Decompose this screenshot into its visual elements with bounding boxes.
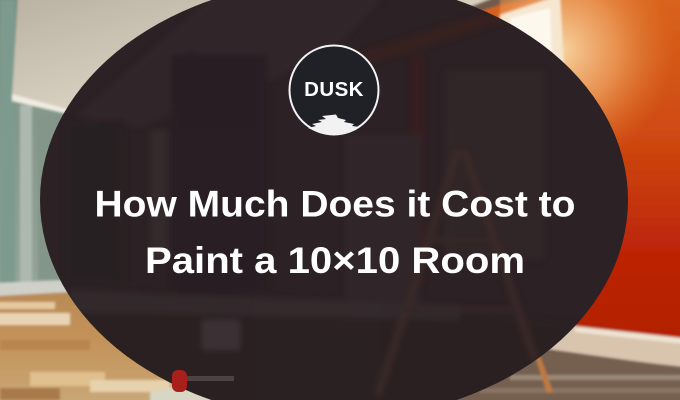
right floor [400, 335, 680, 400]
icon: brush stroke [308, 114, 360, 135]
right baseboard [540, 322, 680, 368]
drop sheet [150, 380, 230, 400]
title: How Much Does it Cost to [94, 182, 576, 224]
ladder leg [533, 350, 553, 393]
paint roller [172, 370, 234, 392]
left green wall [0, 0, 200, 300]
ceiling [12, 0, 500, 128]
logo wordmark: DUSK [304, 78, 364, 101]
title: Paint a 10×10 Room [145, 239, 525, 281]
orange right wall [360, 0, 680, 340]
faint room detail seen through the ellipse [70, 0, 576, 400]
window [500, 0, 565, 80]
left baseboard [0, 280, 70, 298]
wood floor [0, 292, 240, 400]
ceiling molding [12, 94, 70, 113]
